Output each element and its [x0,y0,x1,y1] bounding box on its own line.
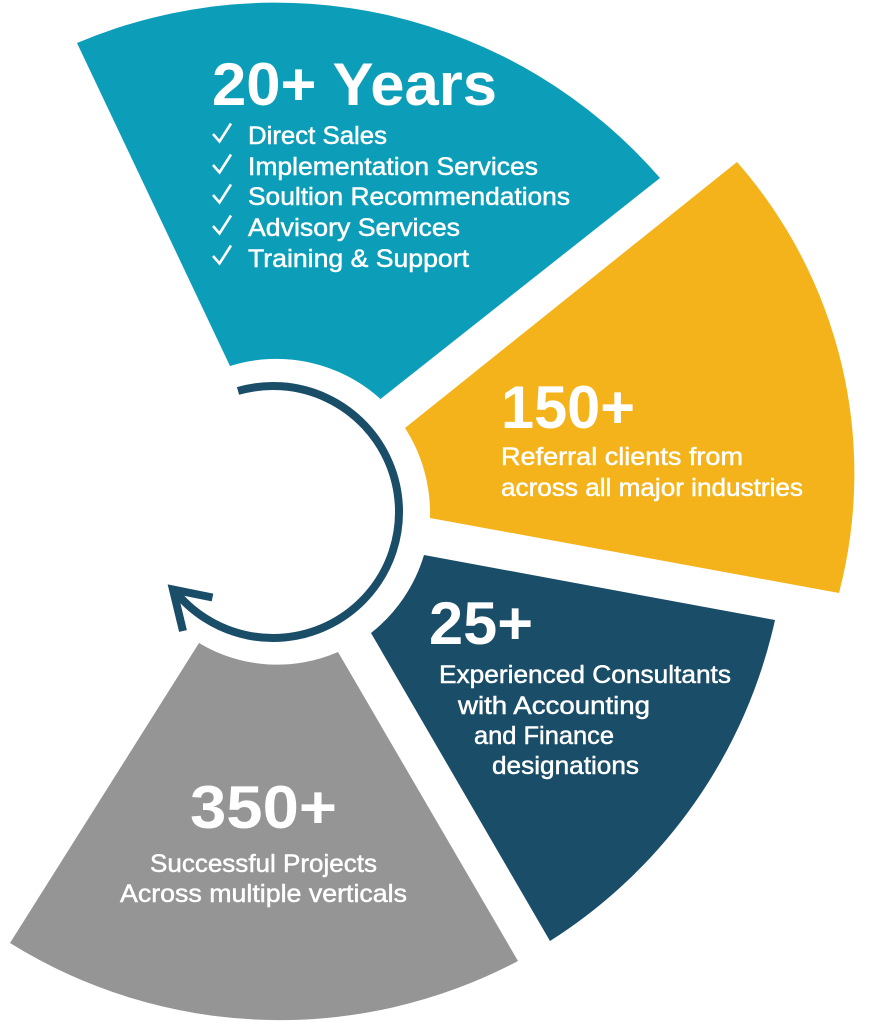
panel: 25+ consultants (navy) [371,555,775,941]
icon: check mark [213,246,231,264]
list item: Advisory Services [248,214,460,242]
description: Across multiple verticals [120,880,407,908]
panel: 20+ years (teal) [77,3,660,399]
panel: 350+ projects (gray) [10,643,518,1020]
description: designations [492,752,639,780]
description: with Accounting [457,692,650,720]
heading: 25+: 25+ [429,590,533,657]
arrow: circular cycle [173,386,399,638]
description: and Finance [474,722,614,750]
heading: 20+ Years: 20+ Years [212,51,497,118]
heading: 350+: 350+ [190,774,337,841]
description: Experienced Consultants [439,661,731,689]
description: across all major industries [501,474,803,502]
panel: 150+ referral clients (yellow) [405,162,854,593]
heading: 150+: 150+ [501,374,635,441]
checklist [213,122,570,273]
list item: Implementation Services [248,153,538,181]
icon: check mark [213,154,231,172]
list item: Direct Sales [248,122,387,150]
icon: check mark [213,184,231,202]
list item: Soultion Recommendations [248,183,570,211]
icon: check mark [213,216,231,234]
icon: check mark [213,124,231,142]
description: Successful Projects [150,850,377,878]
list item: Training & Support [248,245,469,273]
description: Referral clients from [501,443,743,471]
